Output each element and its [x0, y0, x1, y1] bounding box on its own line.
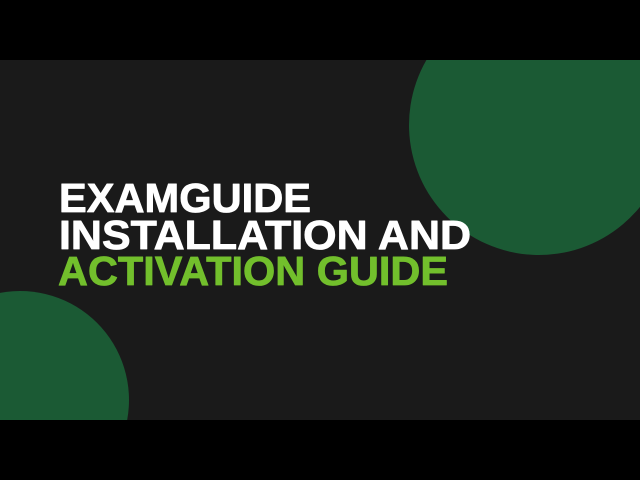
- title line 3: ACTIVATION GUIDE: [58, 248, 448, 294]
- decorative circle: top right: [409, 60, 640, 255]
- title: [58, 175, 471, 294]
- title line 1: EXAMGUIDE: [59, 175, 311, 221]
- dark background panel: [0, 60, 640, 420]
- title line 2: INSTALLATION AND: [59, 212, 471, 258]
- decorative circle: bottom left: [0, 291, 129, 420]
